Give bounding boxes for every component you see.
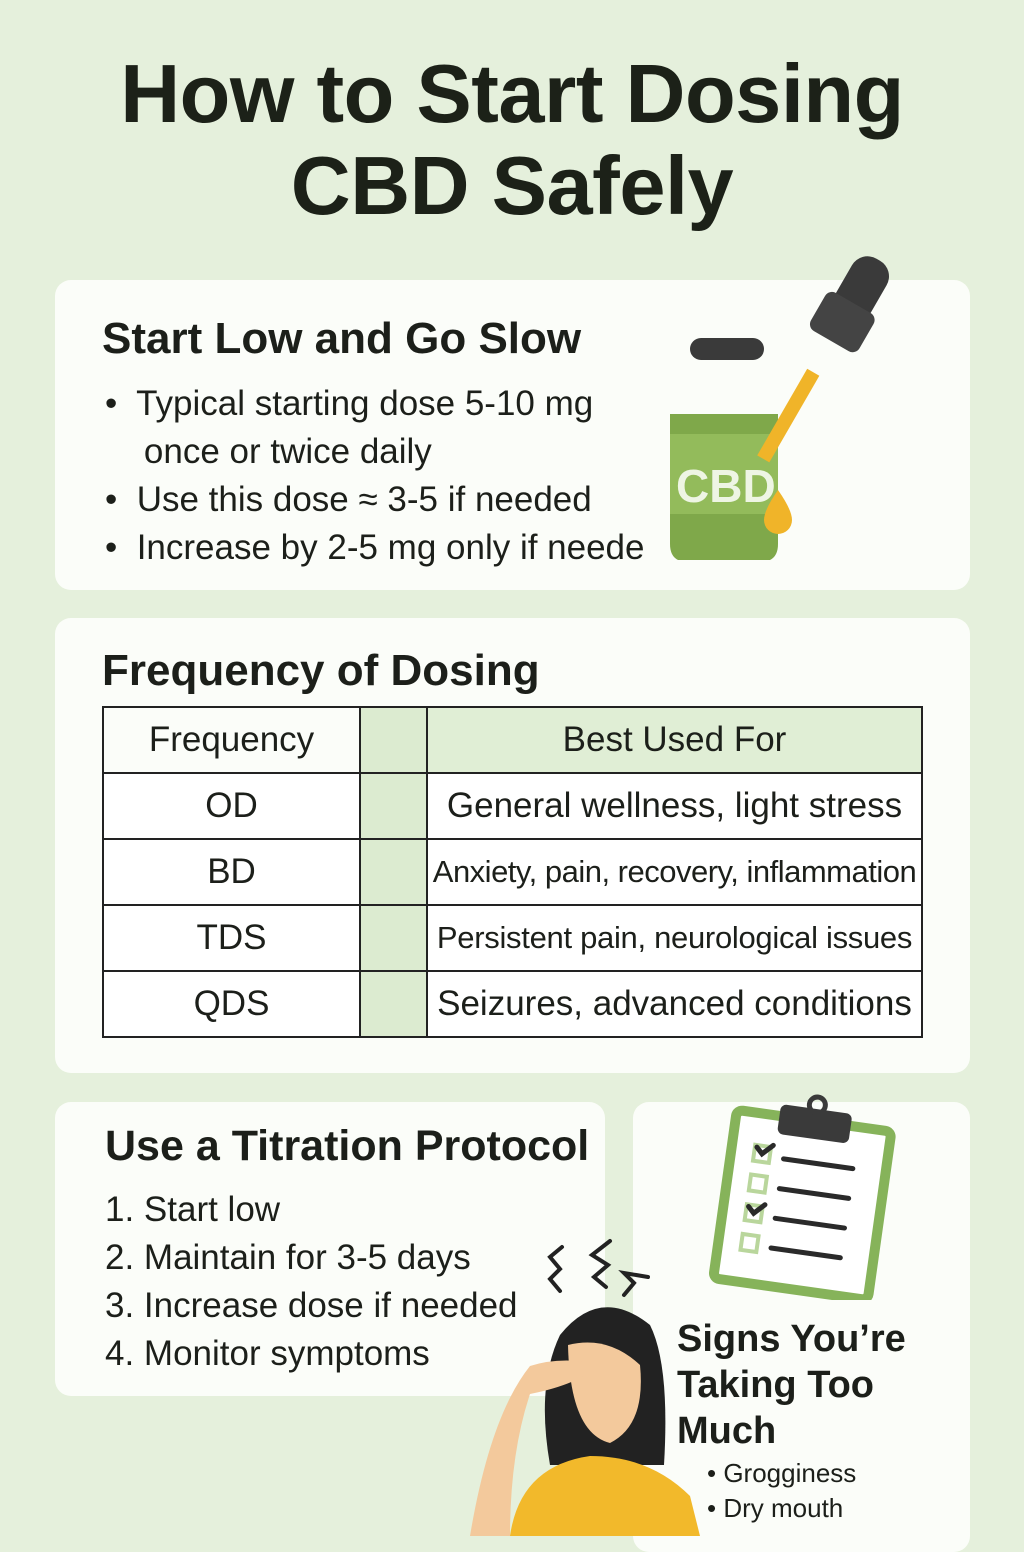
bullet list: • Typical starting dose 5-10 mg — [105, 384, 593, 423]
table: frequency of dosing — [102, 706, 923, 1038]
heading: signs: Signs You’re — [677, 1318, 906, 1360]
table: frequency of dosing: QDS — [194, 984, 269, 1023]
numbered steps — [105, 1190, 518, 1373]
symptom list: • Grogginess — [707, 1458, 856, 1488]
panel: frequency — [55, 618, 970, 1073]
heading: signs: Much — [677, 1410, 776, 1452]
numbered steps: 3. Increase dose if needed — [105, 1286, 518, 1325]
panel: start low — [55, 280, 970, 590]
numbered steps: 4. Monitor symptoms — [105, 1334, 430, 1373]
table: frequency of dosing: General wellness, light stress — [447, 786, 902, 825]
table: frequency of dosing: Seizures, advanced conditions — [437, 984, 912, 1023]
icon: CBD bottle with dropper — [670, 256, 889, 560]
heading: titration: Use a Titration Protocol — [105, 1122, 589, 1170]
table: frequency of dosing: OD — [205, 786, 258, 825]
table: frequency of dosing: Anxiety, pain, recovery, inflammation — [433, 854, 916, 889]
heading: signs: Taking Too — [677, 1364, 874, 1406]
icon: CBD bottle with dropper: CBD — [676, 460, 776, 512]
numbered steps: 2. Maintain for 3-5 days — [105, 1238, 471, 1277]
heading: signs — [677, 1318, 906, 1452]
title: CBD Safely — [291, 139, 733, 232]
icon: clipboard — [709, 1094, 896, 1300]
heading: frequency: Frequency of Dosing — [102, 646, 540, 695]
title — [120, 47, 904, 232]
panel: signs — [633, 1102, 970, 1552]
table: frequency of dosing: BD — [207, 852, 256, 891]
symptom list — [707, 1458, 856, 1523]
bullet list: • Increase by 2-5 mg only if neede — [105, 528, 644, 567]
numbered steps: 1. Start low — [105, 1190, 280, 1229]
panel: titration — [55, 1102, 605, 1396]
title: How to Start Dosing — [120, 47, 904, 140]
heading: start low: Start Low and Go Slow — [102, 314, 581, 363]
table: frequency of dosing: Frequency — [149, 720, 314, 759]
bullet list: once or twice daily — [144, 432, 432, 471]
bullet list — [105, 384, 644, 567]
illustration: tired woman — [470, 1238, 700, 1536]
table: frequency of dosing: Best Used For — [563, 720, 786, 759]
bullet list: • Use this dose ≈ 3-5 if needed — [105, 480, 592, 519]
table: frequency of dosing: Persistent pain, neurological issues — [437, 920, 912, 955]
table: frequency of dosing: TDS — [196, 918, 266, 957]
symptom list: • Dry mouth — [707, 1493, 843, 1523]
